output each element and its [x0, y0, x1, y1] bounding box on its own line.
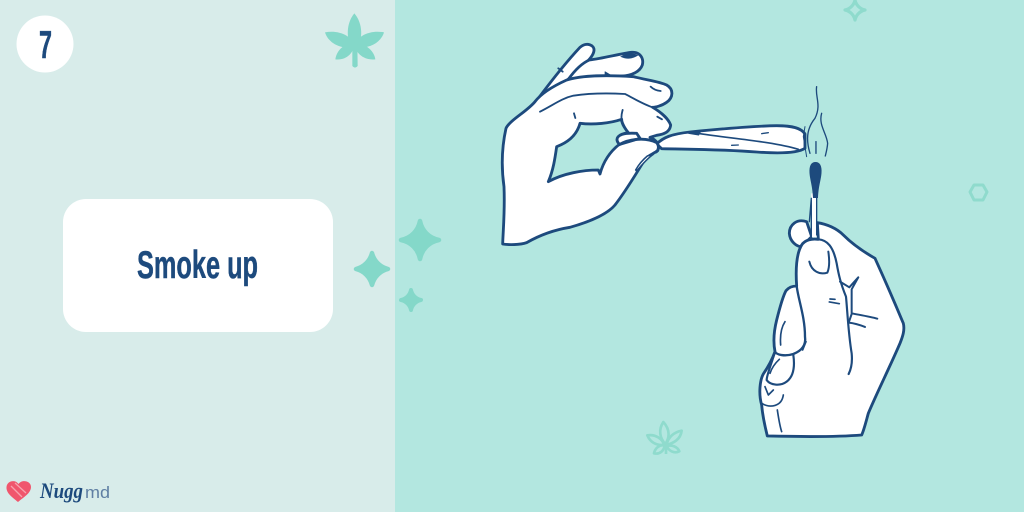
hand silhouette: [502, 76, 672, 245]
icon: sparkle top right: [845, 0, 865, 20]
icon: sparkle small: [401, 290, 421, 310]
finger behind match: [789, 221, 812, 247]
logo: Nuggmd: [6, 478, 110, 503]
logo: Nuggmd: Nugg: [39, 478, 83, 503]
smoke wisps: [803, 87, 828, 157]
icon: hexagon outline: [970, 185, 987, 200]
step number badge: 7: [39, 24, 52, 67]
ring finger: [568, 52, 643, 80]
illustration: left hand holding joint: [502, 44, 805, 245]
icon: sparkle medium: [356, 253, 388, 285]
panel: right background: [395, 0, 1024, 512]
finger creases: [540, 68, 662, 119]
logo: Nuggmd: md: [85, 483, 110, 502]
match stick: [811, 193, 817, 237]
match head: [809, 162, 822, 198]
thumb and finger lines: [775, 286, 805, 355]
panel: left background: [0, 0, 395, 512]
icon: sparkle large: [401, 221, 439, 259]
thumb: [619, 139, 659, 152]
joint: [657, 126, 805, 153]
step number badge: [16, 16, 74, 72]
icon: cannabis leaf top: [325, 13, 384, 68]
hole between fingers: [548, 119, 628, 182]
icon: heart: [6, 481, 31, 502]
thumb nail: [636, 154, 653, 171]
supporting finger tip: [616, 133, 640, 145]
illustration: right hand holding match: [760, 193, 904, 437]
hand silhouette: [760, 223, 904, 437]
pinky finger: [538, 44, 594, 98]
heading card: [63, 199, 333, 332]
icon: cannabis leaf outline: [647, 422, 682, 454]
heading card: Smoke up: [137, 244, 258, 287]
